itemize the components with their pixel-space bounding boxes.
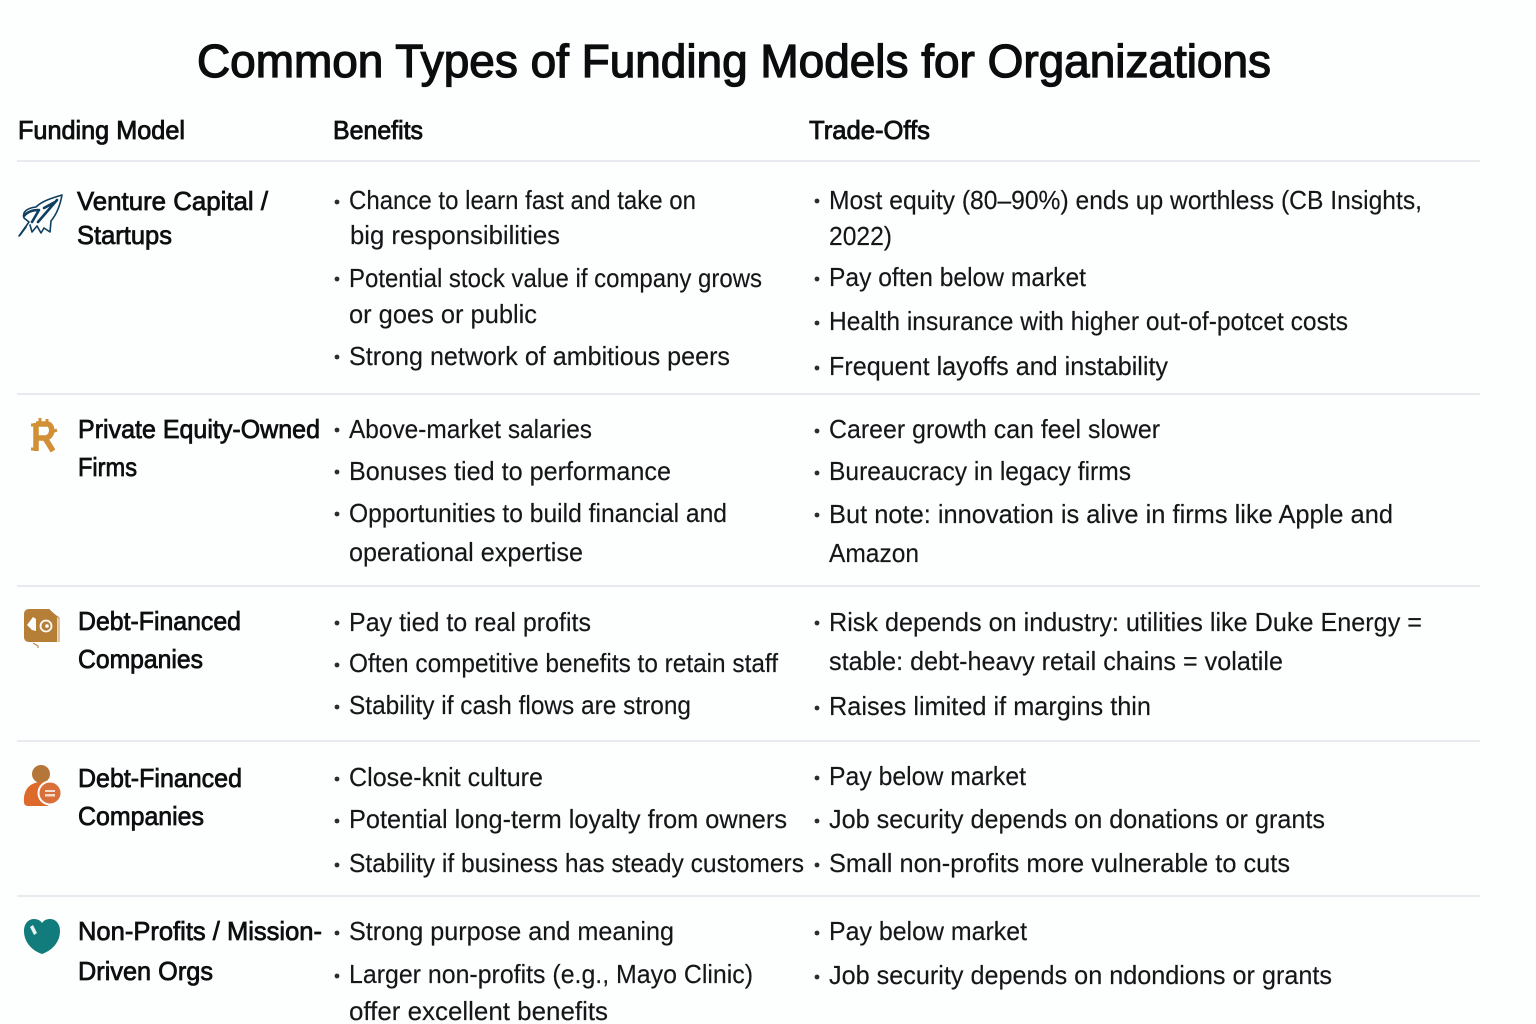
icon: person with badge	[24, 765, 62, 806]
benefits list: or goes or public	[349, 299, 537, 329]
trade-offs list	[815, 607, 1422, 721]
row: debt-financed companies (second)	[24, 761, 1325, 878]
benefits list: Strong network of ambitious peers	[349, 341, 730, 371]
model name: Companies	[78, 644, 203, 674]
benefits list: Strong purpose and meaning	[349, 916, 674, 946]
column headers: Trade-Offs	[809, 115, 930, 145]
trade-offs list: Bureaucracy in legacy firms	[829, 456, 1131, 486]
benefits list: Stability if business has steady customers	[349, 848, 804, 878]
trade-offs list: stable: debt-heavy retail chains = volatile	[829, 646, 1283, 676]
trade-offs list: Career growth can feel slower	[829, 414, 1160, 444]
column headers: Benefits	[333, 115, 423, 145]
benefits list	[335, 607, 779, 720]
row: debt-financed companies (first)	[24, 606, 1422, 721]
trade-offs list: Frequent layoffs and instability	[829, 351, 1168, 381]
column headers: Funding Model	[18, 115, 185, 145]
model name: Non-Profits / Mission-	[78, 916, 322, 946]
model name	[77, 186, 269, 250]
trade-offs list: Most equity (80–90%) ends up worthless (CB Insights,	[829, 185, 1422, 215]
benefits list	[335, 414, 727, 567]
trade-offs list	[815, 916, 1332, 990]
benefits list: Often competitive benefits to retain staff	[349, 648, 779, 678]
icon: gold R coin symbol	[31, 418, 57, 451]
model name: Companies	[78, 801, 204, 831]
model name: Startups	[77, 220, 172, 250]
title: Common Types of Funding Models for Organizations	[197, 35, 1271, 87]
benefits list	[335, 762, 804, 878]
benefits list: Potential stock value if company grows	[349, 263, 762, 293]
trade-offs list	[815, 414, 1393, 568]
trade-offs list: Amazon	[829, 538, 919, 568]
model name	[78, 414, 320, 482]
benefits list: Above-market salaries	[349, 414, 592, 444]
model name: Venture Capital /	[77, 186, 269, 216]
trade-offs list: Job security depends on ndondions or grants	[829, 960, 1332, 990]
model name: Debt-Financed	[78, 606, 241, 636]
benefits list: Potential long-term loyalty from owners	[349, 804, 787, 834]
trade-offs list: Pay below market	[829, 761, 1027, 791]
icon: rocket	[19, 195, 62, 236]
trade-offs list: Pay often below market	[829, 262, 1087, 292]
model name	[78, 763, 242, 831]
trade-offs list: Raises limited if margins thin	[829, 691, 1151, 721]
benefits list	[335, 916, 753, 1024]
row: non-profits / mission-driven orgs	[24, 916, 1332, 1024]
model name: Firms	[78, 452, 137, 482]
benefits list: operational expertise	[349, 537, 583, 567]
trade-offs list	[815, 761, 1325, 878]
benefits list: Bonuses tied to performance	[349, 456, 671, 486]
model name	[78, 916, 322, 986]
row: private equity-owned firms	[31, 414, 1393, 568]
icon: bronze book	[24, 609, 59, 648]
trade-offs list: Health insurance with higher out-of-potcet costs	[829, 306, 1348, 336]
model name	[78, 606, 241, 674]
benefits list: Stability if cash flows are strong	[349, 690, 691, 720]
benefits list: Larger non-profits (e.g., Mayo Clinic)	[349, 959, 753, 989]
benefits list: Close-knit culture	[349, 762, 543, 792]
row: venture capital / startups	[19, 185, 1422, 381]
column headers	[18, 115, 930, 145]
icon: teal heart	[24, 919, 60, 954]
trade-offs list: Job security depends on donations or grants	[829, 804, 1325, 834]
trade-offs list: Small non-profits more vulnerable to cuts	[829, 848, 1290, 878]
trade-offs list: 2022)	[829, 221, 892, 251]
model name: Debt-Financed	[78, 763, 242, 793]
benefits list	[335, 185, 762, 371]
trade-offs list: Pay below market	[829, 916, 1028, 946]
trade-offs list: Risk depends on industry: utilities like Duke Energy =	[829, 607, 1422, 637]
trade-offs list: But note: innovation is alive in firms like Apple and	[829, 499, 1393, 529]
model name: Private Equity-Owned	[78, 414, 320, 444]
model name: Driven Orgs	[78, 956, 213, 986]
benefits list: Chance to learn fast and take on	[349, 185, 696, 215]
benefits list: Opportunities to build financial and	[349, 498, 727, 528]
benefits list: big responsibilities	[350, 220, 560, 250]
benefits list: Pay tied to real profits	[349, 607, 591, 637]
trade-offs list	[815, 185, 1422, 381]
